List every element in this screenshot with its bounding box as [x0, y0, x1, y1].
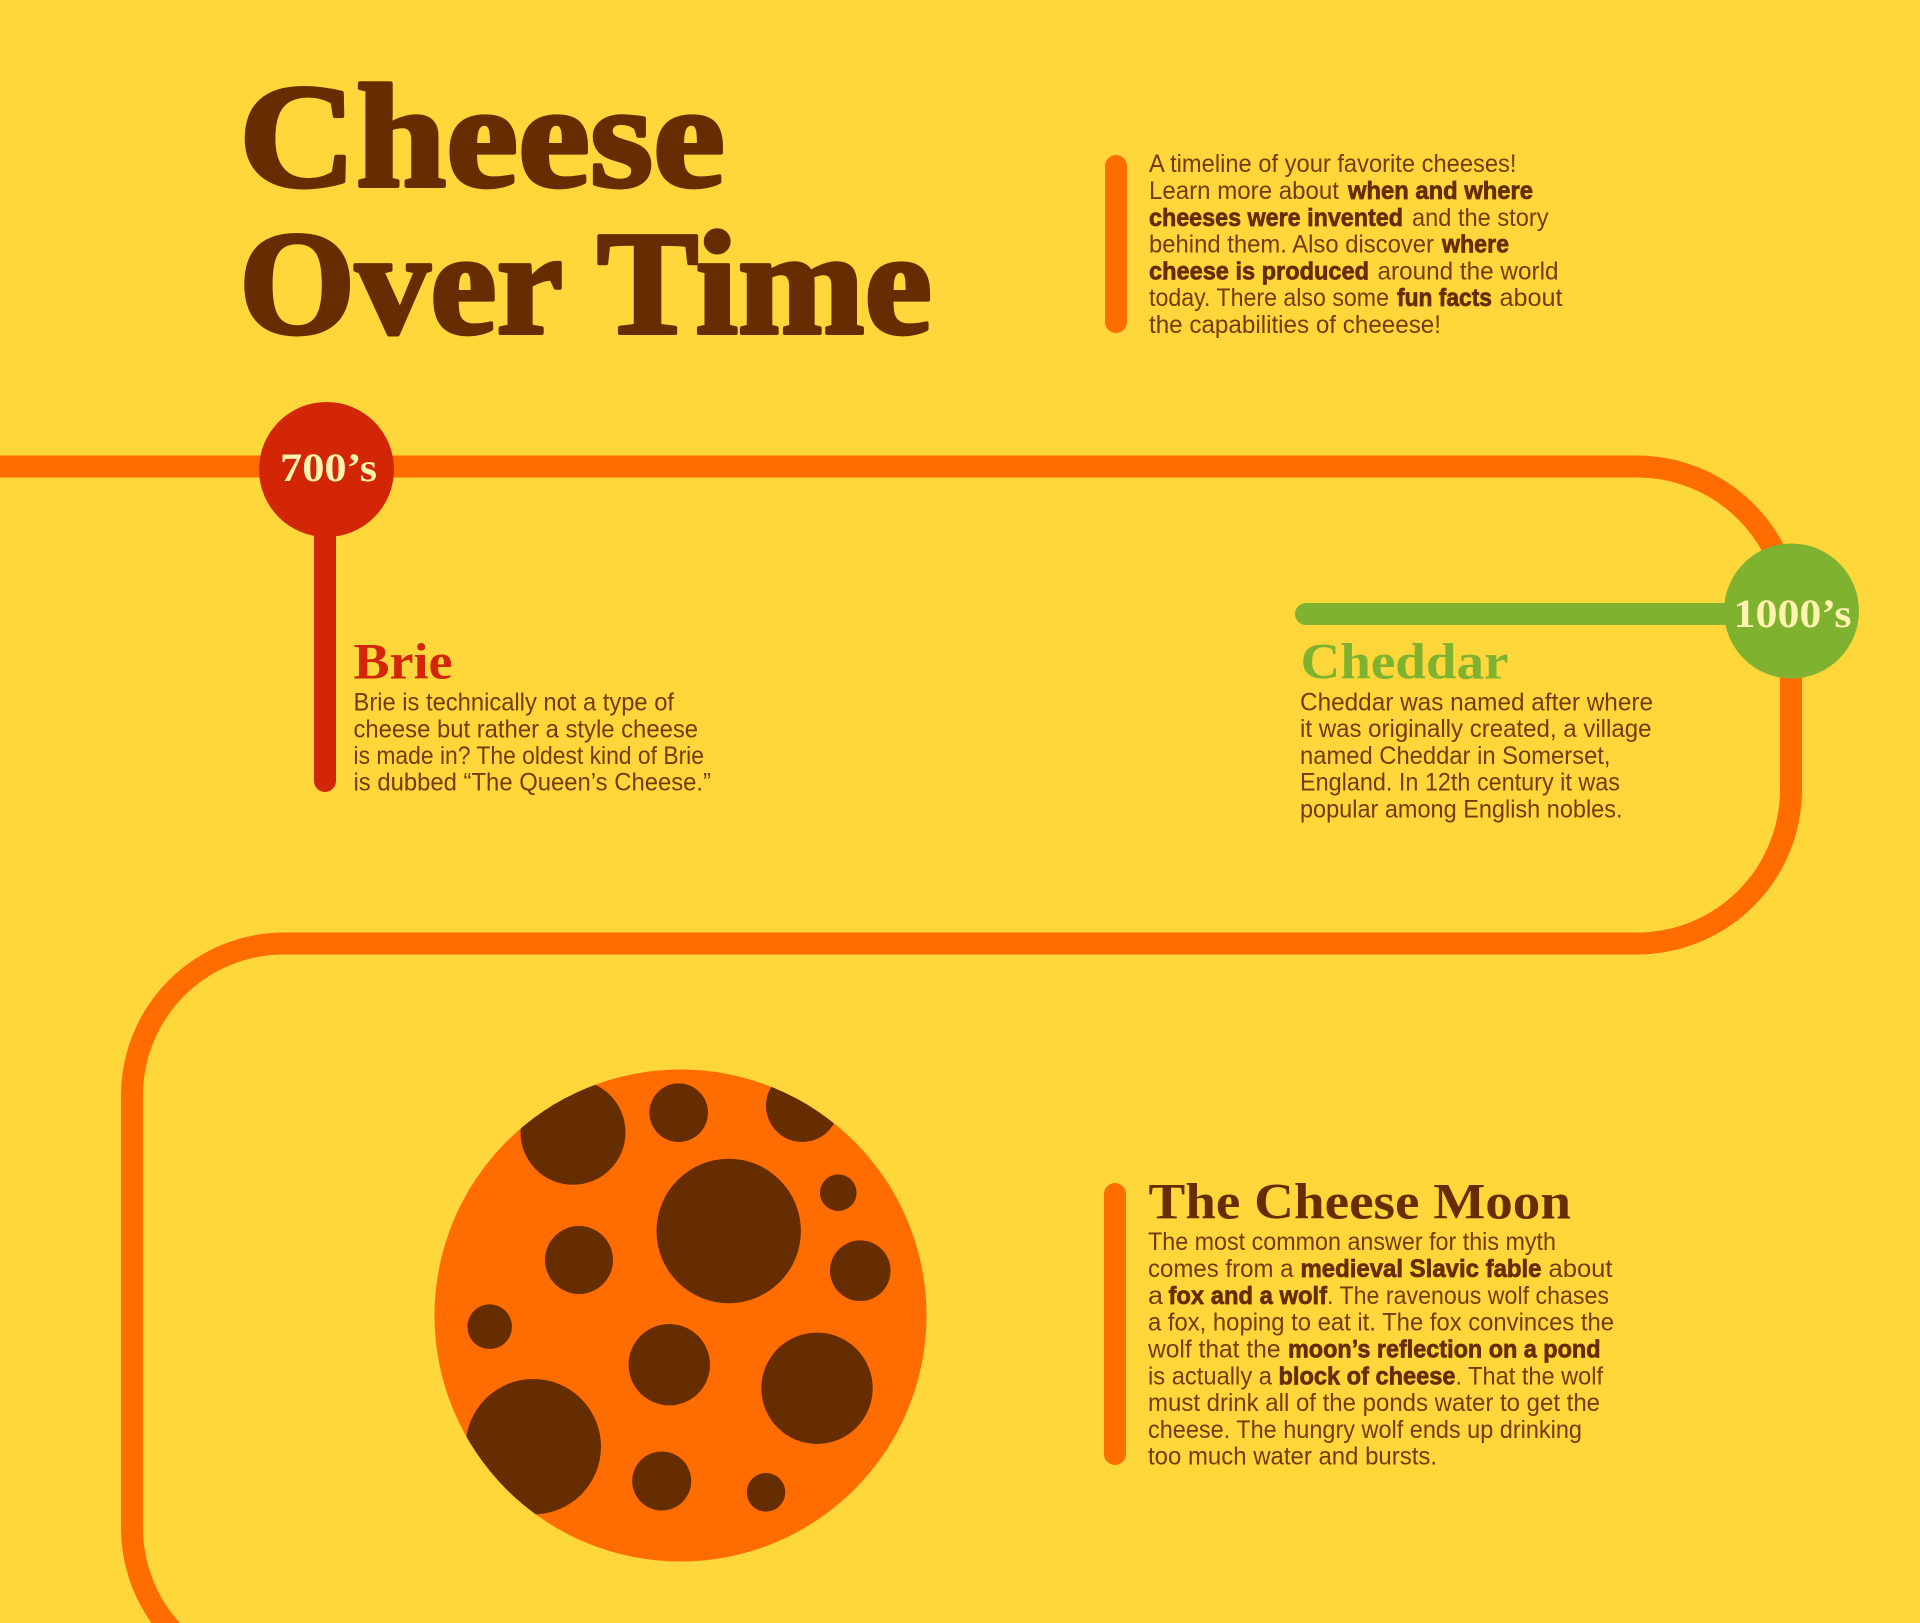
moon text: block of cheese [1278, 1362, 1456, 1390]
1000s marker: 1000’s [1734, 591, 1852, 636]
intro text: Learn more about [1149, 177, 1339, 205]
intro text: fun facts [1397, 284, 1492, 312]
Cheddar connector [1306, 603, 1740, 625]
Cheddar heading: Cheddar [1300, 634, 1508, 690]
Brie stem [314, 500, 336, 781]
moon text [1147, 1228, 1614, 1470]
700s marker: 700’s [280, 445, 377, 490]
title: Time [597, 202, 932, 366]
moon text: cheese. The hungry wolf ends up drinking [1148, 1416, 1582, 1444]
moon text: a [1148, 1282, 1163, 1310]
title: Cheese [239, 55, 725, 219]
Cheddar text [1300, 688, 1653, 824]
Brie text: is made in? The oldest kind of Brie [354, 742, 704, 770]
intro text: cheeses were invented [1149, 204, 1403, 232]
intro accent bar [1105, 155, 1127, 333]
moon text: must drink all of the ponds water to get the [1148, 1389, 1600, 1417]
Brie text: is dubbed “The Queen’s Cheese.” [354, 768, 711, 796]
Cheddar text: Cheddar was named after where [1300, 688, 1653, 716]
Cheddar text: England. In 12th century it was [1300, 768, 1620, 796]
moon text: comes from a [1148, 1255, 1294, 1283]
intro text: A timeline of your favorite cheeses! [1149, 150, 1516, 178]
700s marker [259, 402, 394, 537]
Brie text: Brie is technically not a type of [354, 688, 674, 716]
intro text: the capabilities of cheeese! [1149, 311, 1441, 339]
intro text: cheese is produced [1149, 258, 1369, 286]
moon text: is actually a [1148, 1362, 1272, 1390]
moon text: medieval Slavic fable [1300, 1255, 1542, 1283]
moon accent bar [1104, 1183, 1126, 1465]
intro text: around the world [1378, 258, 1558, 286]
Brie text [354, 688, 711, 796]
timeline path [0, 466, 1791, 1623]
Cheddar text: named Cheddar in Somerset, [1300, 742, 1610, 770]
Brie text: cheese but rather a style cheese [354, 716, 698, 744]
moon text: a fox, hoping to eat it. The fox convinces the [1148, 1308, 1614, 1336]
moon text: . That the wolf [1456, 1362, 1603, 1390]
1000s marker [1724, 544, 1859, 678]
cheese moon illustration [434, 1069, 926, 1562]
intro text: about [1500, 284, 1563, 312]
Brie heading: Brie [354, 634, 452, 690]
intro text: today. There also some [1149, 284, 1389, 312]
intro text: behind them. Also discover [1149, 230, 1434, 258]
moon text: The most common answer for this myth [1148, 1228, 1556, 1256]
moon text: moon’s reflection on a pond [1288, 1336, 1600, 1364]
moon heading: The Cheese Moon [1148, 1174, 1571, 1230]
Cheddar text: popular among English nobles. [1300, 796, 1622, 824]
moon text: about [1548, 1255, 1613, 1283]
moon text: wolf that the [1147, 1336, 1280, 1364]
intro text: where [1441, 230, 1509, 258]
intro text: and the story [1412, 204, 1549, 232]
intro text [1149, 150, 1563, 339]
intro text: when and where [1347, 177, 1533, 205]
title: Over [239, 202, 563, 366]
title [239, 55, 932, 366]
moon text: fox and a wolf [1168, 1282, 1328, 1310]
moon text: too much water and bursts. [1148, 1442, 1437, 1470]
moon text: . The ravenous wolf chases [1327, 1282, 1609, 1310]
Cheddar text: it was originally created, a village [1300, 715, 1652, 743]
